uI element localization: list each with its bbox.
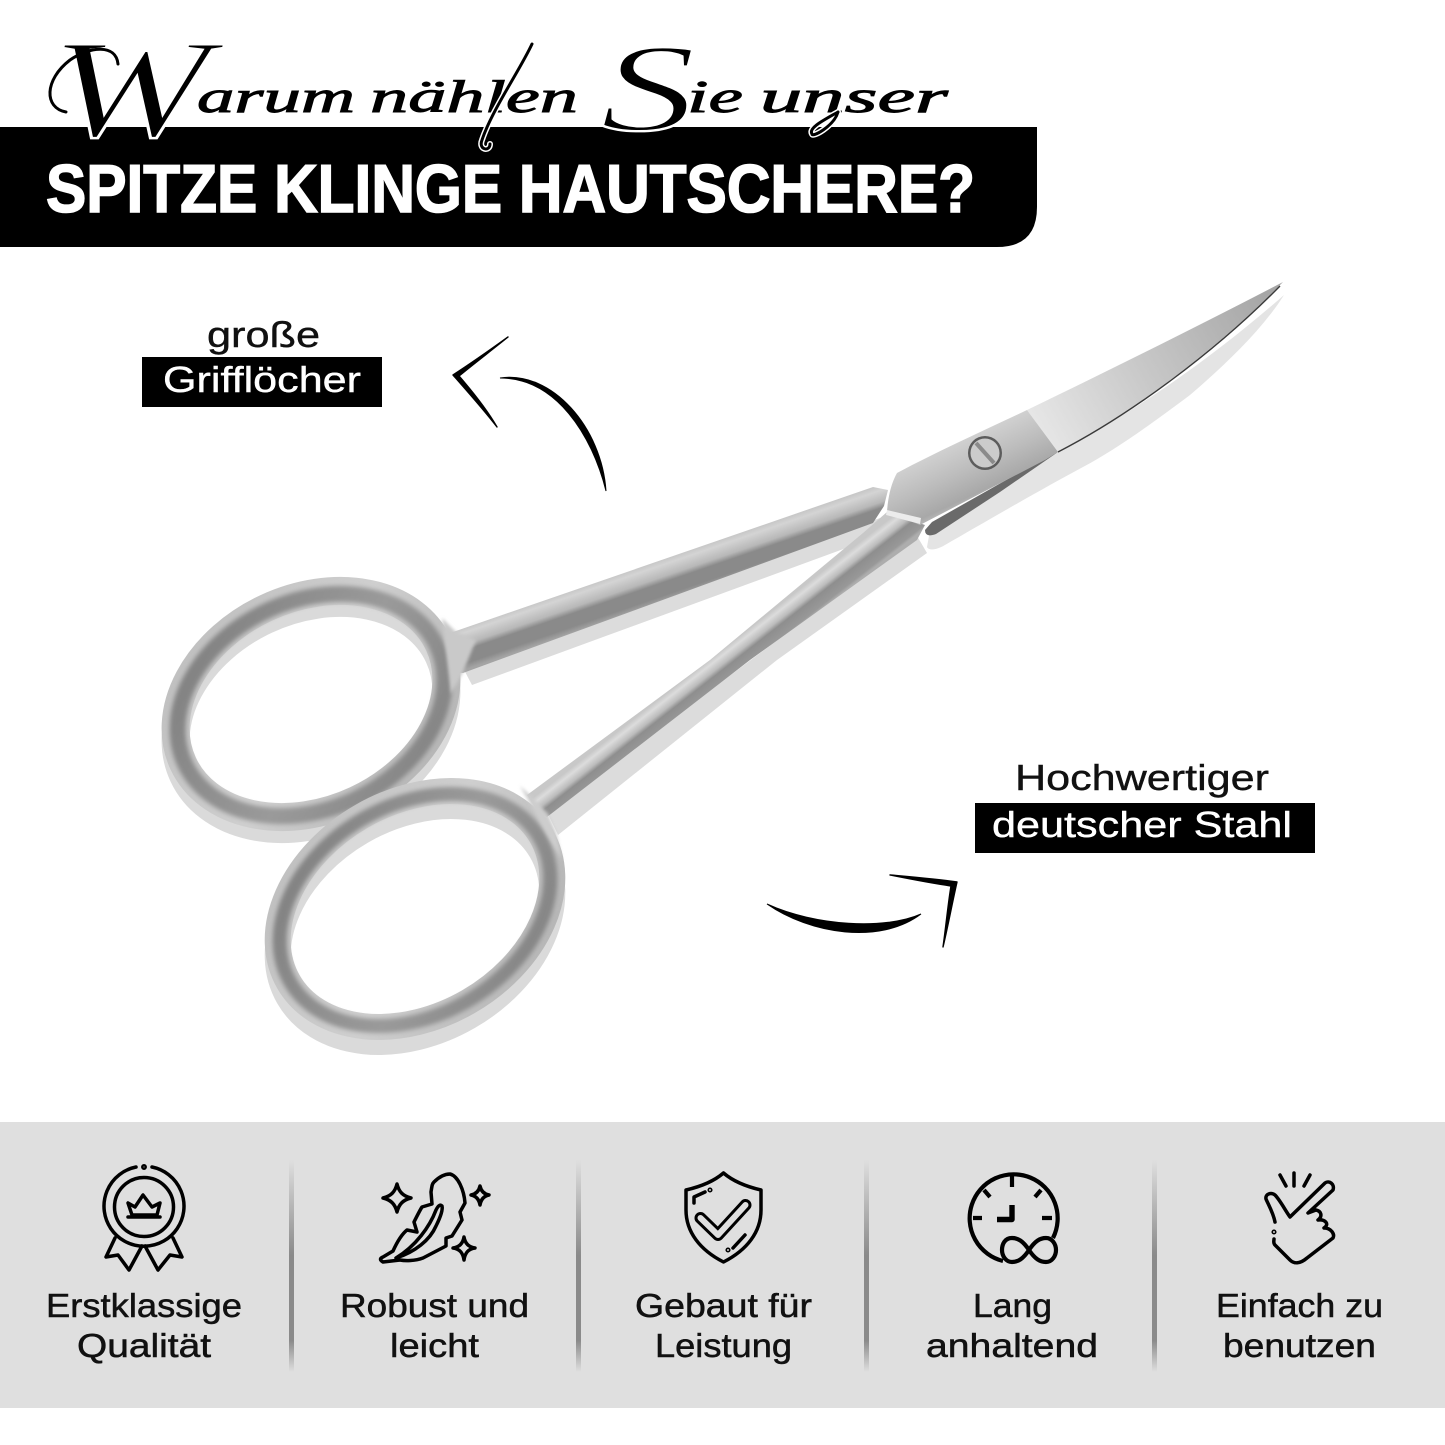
text: Lang anhaltend: anhaltend [926, 1327, 1098, 1364]
callout: Hochwertiger deutscher Stahl: deutscher Stahl [992, 804, 1292, 845]
callout: große Grifflöcher: Grifflöcher [163, 359, 361, 400]
text: Einfach zu benutzen: benutzen [1223, 1327, 1376, 1364]
title: script line: W [50, 12, 226, 167]
icon: clock with infinity [970, 1174, 1058, 1262]
text: Lang anhaltend [926, 1287, 1098, 1364]
icon: finger snap hand [1266, 1173, 1334, 1263]
arrow: to steel [767, 875, 957, 947]
hinge screw [968, 436, 1002, 470]
lower handle ring [235, 743, 595, 1075]
title banner [0, 127, 1037, 247]
upper shank [440, 487, 888, 673]
lower shank [527, 512, 925, 817]
title: script line [50, 12, 950, 167]
text: Einfach zu benutzen [1216, 1287, 1383, 1364]
hinge plate highlight [886, 510, 921, 524]
lower blade [927, 295, 1284, 549]
text: Erstklassige Qualität: Erstklassige [46, 1287, 242, 1324]
text: Erstklassige Qualität: Qualität [77, 1327, 211, 1364]
title: script line: unser [760, 71, 950, 122]
title: script flourishes [50, 44, 838, 149]
scissors shadows [138, 518, 927, 1090]
text: Robust und leicht [340, 1287, 529, 1364]
icon: feather with sparkles [380, 1174, 489, 1262]
text: Gebaut für Leistung: Gebaut für [635, 1287, 812, 1324]
text: Erstklassige Qualität [46, 1287, 242, 1364]
title: bold heading: SPITZE KLINGE HAUTSCHERE? [46, 151, 975, 227]
text: Gebaut für Leistung [635, 1287, 812, 1364]
icon: medal [104, 1166, 184, 1270]
lower blade dark gap [925, 452, 1058, 535]
title: script line: ie [687, 71, 743, 122]
title: script line: arum [197, 71, 355, 122]
callout: große Grifflöcher [142, 314, 382, 407]
callout: Hochwertiger deutscher Stahl: Hochwertiger [1015, 757, 1269, 798]
blade edge line [1058, 286, 1280, 452]
text: Einfach zu benutzen: Einfach zu [1216, 1287, 1383, 1324]
upper blade [1027, 282, 1283, 452]
hinge plate [887, 410, 1058, 525]
title: script line: S [600, 20, 696, 158]
text: Robust und leicht: Robust und [340, 1287, 529, 1324]
callout: große Grifflöcher: große [207, 314, 320, 355]
text: Lang anhaltend: Lang [973, 1287, 1052, 1324]
text: Gebaut für Leistung: Leistung [655, 1327, 792, 1364]
panel: feature bar [0, 1122, 1445, 1408]
icon: shield with check [686, 1173, 761, 1262]
arrow: to handle holes [453, 337, 606, 491]
upper handle ring [138, 548, 484, 860]
title: script line: nählen [370, 71, 578, 122]
callout: Hochwertiger deutscher Stahl [975, 757, 1315, 853]
text: Robust und leicht: leicht [390, 1327, 479, 1364]
product image: scissors [138, 282, 1284, 1090]
